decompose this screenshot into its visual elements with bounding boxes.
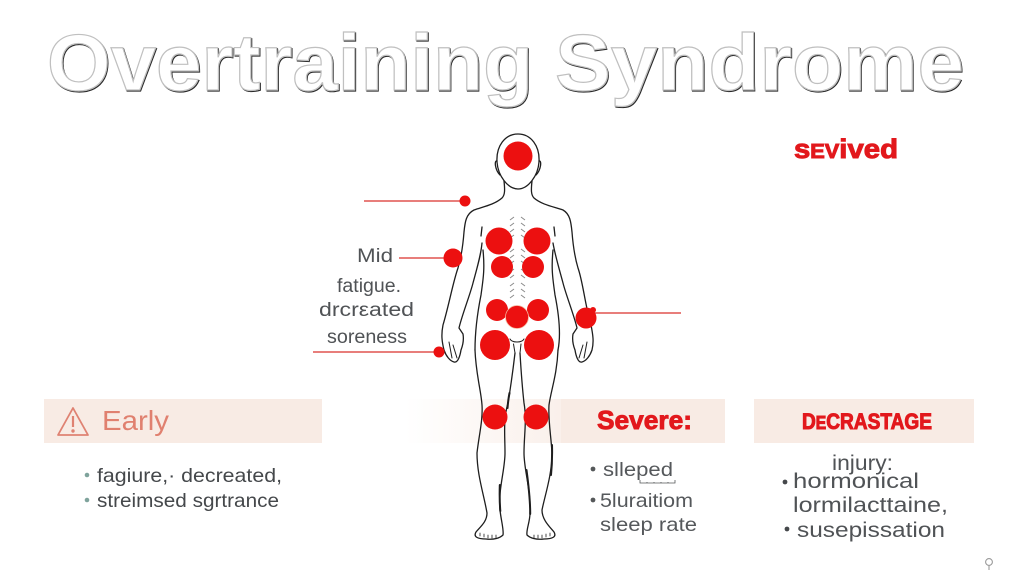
body outline figure <box>442 134 593 539</box>
right arm and shoulder <box>531 181 593 362</box>
title: Overtraining <box>47 18 533 107</box>
red pain markers <box>434 142 596 430</box>
title: Syndrome <box>555 18 964 107</box>
callout label: mid: Mid <box>357 246 393 267</box>
head <box>497 134 539 189</box>
text block: early list <box>85 465 282 512</box>
icon: warning triangle <box>58 408 88 435</box>
callout lines <box>313 201 681 352</box>
text block: severe list <box>591 459 697 536</box>
text block: severe list: sleep rate <box>600 514 697 536</box>
text block: decrastage list: lormilacttaine, <box>793 494 948 517</box>
text block: callout symptoms <box>319 276 414 348</box>
panel: decrastage header <box>754 399 974 443</box>
title <box>47 18 965 108</box>
toes <box>480 533 550 538</box>
spine chevrons <box>510 217 525 298</box>
panel: severe header <box>561 399 725 443</box>
left arm and shoulder <box>442 181 505 362</box>
heading: severe: Severe: <box>597 405 692 435</box>
text block: decrastage list: susepissation <box>797 519 945 542</box>
left leg <box>475 350 515 539</box>
right leg <box>520 350 558 539</box>
text block: decrastage list: hormonical <box>793 470 919 493</box>
heading: decrastage: DECRASTAGE <box>802 409 932 434</box>
title: Syndrome <box>556 19 965 108</box>
inner leg shading <box>500 393 552 514</box>
panel: faded band behind legs <box>405 399 561 443</box>
text block: callout symptoms: fatigue. <box>337 276 401 297</box>
torso sides <box>475 227 484 350</box>
text block: decrastage list <box>783 452 948 542</box>
text block: severe list: 5luraitiom <box>600 490 693 512</box>
title: Overtraining <box>48 19 534 108</box>
text block: decrastage list: injury: <box>832 452 893 475</box>
heading: early: Early <box>102 405 169 436</box>
crotch <box>510 339 524 353</box>
text block: severe list: slleped <box>603 459 673 481</box>
panel: early header <box>44 399 322 443</box>
text block: early list: streimsed sgrtrance <box>97 490 279 512</box>
text block: early list: fagiure,· decreated, <box>97 465 282 487</box>
heading: sevived: sEVived <box>794 134 898 164</box>
text block: callout symptoms: drcrεated <box>319 300 414 321</box>
text block: callout symptoms: soreness <box>327 327 407 348</box>
icon: small pin <box>986 559 992 570</box>
